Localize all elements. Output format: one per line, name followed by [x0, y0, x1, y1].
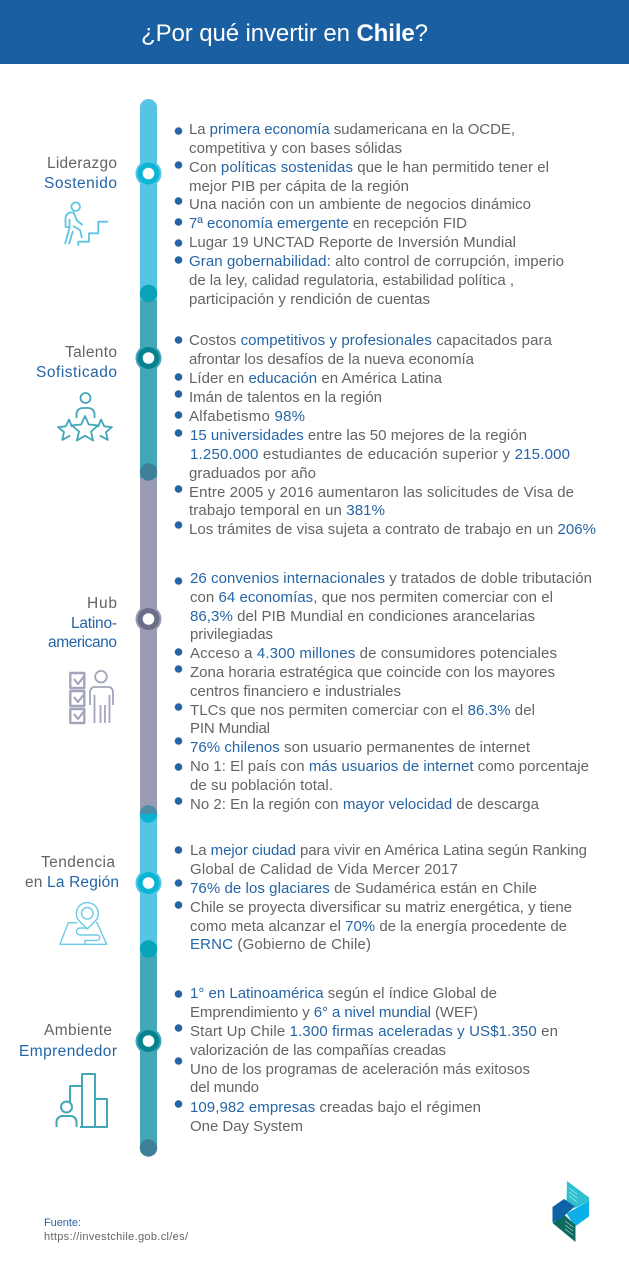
- source note: [44, 1217, 189, 1243]
- section: Ambiente Emprendedor: [19, 985, 558, 1135]
- bullet list: Ambiente: del mundo: [190, 1079, 259, 1096]
- bullet list: Liderazgo: Una nación con un ambiente de negocios dinámico: [189, 196, 531, 213]
- bullet list: Talento: Imán de talentos en la región: [189, 389, 382, 406]
- bullet list: Hub: Acceso a 4.300 millones de consumidores potenciales: [190, 645, 557, 662]
- bullet list: Hub: Zona horaria estratégica que coincide con los mayores: [190, 664, 555, 681]
- bullet list: Hub: No 1: El país con más usuarios de internet como porcentaje: [190, 758, 589, 775]
- heading: Liderazgo Sostenido: [44, 155, 117, 192]
- heading: Tendencia en La Región: [25, 854, 119, 891]
- heading: Talento Sofisticado: [36, 344, 117, 381]
- bullet list: Talento: graduados por año: [189, 465, 316, 482]
- heading: Hub Latino-americano: Latino-: [71, 615, 117, 632]
- timeline bar: [140, 99, 157, 1157]
- bullet list: Liderazgo: competitiva y con bases sólidas: [189, 140, 402, 157]
- bullet list: Hub: PIN Mundial: [190, 720, 270, 737]
- header band: [0, 0, 629, 64]
- bullet list: Tendencia: ERNC (Gobierno de Chile): [190, 936, 371, 953]
- bullet list: Liderazgo: Con políticas sostenidas que le han permitido tener el: [189, 159, 549, 176]
- section: Talento Sofisticado: [36, 332, 596, 538]
- bullet list: Tendencia: La mejor ciudad para vivir en América Latina según Ranking: [190, 842, 587, 859]
- heading: Talento Sofisticado: Talento: [65, 344, 117, 361]
- bullet list: Talento: Costos competitivos y profesionales capacitados para: [189, 332, 553, 349]
- bullet list: Hub: 86,3% del PIB Mundial en condiciones arancelarias: [190, 608, 535, 625]
- bullet list: Talento: trabajo temporal en un 381%: [189, 502, 385, 519]
- bullet list: Hub: de su población total.: [190, 777, 333, 794]
- bullet list: Talento: Líder en educación en América Latina: [189, 370, 443, 387]
- timeline node 5: [136, 1028, 162, 1054]
- icon: location pin on map: [60, 903, 107, 944]
- bullet list: Talento: Los trámites de visa sujeta a contrato de trabajo en un 206%: [189, 521, 596, 538]
- heading: Liderazgo Sostenido: Sostenido: [44, 175, 117, 192]
- section: Tendencia en La Región: [25, 842, 587, 953]
- bullet list: Hub: centros financiero e industriales: [190, 683, 401, 700]
- bullet list: Ambiente: Emprendimiento y 6° a nivel mundial (WEF): [190, 1004, 478, 1021]
- icon: person and bar chart: [56, 1074, 107, 1127]
- bullet list: Tendencia: como meta alcanzar el 70% de la energía procedente de: [190, 918, 567, 935]
- bullet list: Liderazgo: 7ª economía emergente en recepción FID: [189, 215, 467, 232]
- bullet list: Hub: [175, 570, 592, 813]
- icon: person with three stars: [58, 393, 112, 440]
- source note: https://investchile.gob.cl/es/: [44, 1231, 189, 1243]
- heading: Tendencia en La Región: Tendencia: [41, 854, 115, 871]
- bullet list: Liderazgo: [175, 121, 564, 308]
- bullet list: Tendencia: [175, 842, 587, 953]
- bullet list: Hub: 26 convenios internacionales y tratados de doble tributación: [190, 570, 592, 587]
- bullet list: Hub: 76% chilenos son usuario permanentes de internet: [190, 739, 531, 756]
- heading: Tendencia en La Región: en La Región: [25, 874, 119, 891]
- heading: Hub Latino-americano: americano: [48, 634, 117, 651]
- bullet list: Ambiente: valorización de las compañías creadas: [190, 1042, 446, 1059]
- bullet list: Tendencia: 76% de los glaciares de Sudamérica están en Chile: [190, 880, 537, 897]
- bullet list: Hub: TLCs que nos permiten comerciar con el 86.3% del: [190, 702, 535, 719]
- bullet list: Liderazgo: mejor PIB per cápita de la región: [189, 178, 409, 195]
- bullet list: Liderazgo: participación y rendición de cuentas: [189, 291, 430, 308]
- bullet list: Ambiente: [175, 985, 558, 1135]
- icon: checklist and person: [70, 671, 113, 723]
- bullet list: Ambiente: 1° en Latinoamérica según el índice Global de: [190, 985, 497, 1002]
- timeline node 2: [136, 345, 162, 371]
- section: Hub Latinoamericano: [48, 570, 592, 813]
- bullet list: Talento: Entre 2005 y 2016 aumentaron las solicitudes de Visa de: [189, 484, 574, 501]
- timeline node 3: [136, 606, 162, 632]
- bullet list: Ambiente: Uno de los programas de aceleración más exitosos: [190, 1061, 530, 1078]
- bullet list: Ambiente: Start Up Chile 1.300 firmas aceleradas y US$1.350 en: [190, 1023, 558, 1040]
- section: Liderazgo Sostenido: [44, 121, 564, 308]
- bullet list: Ambiente: One Day System: [190, 1118, 303, 1135]
- bullet list: Hub: con 64 economías, que nos permiten comerciar con el: [190, 589, 553, 606]
- bullet list: Talento: afrontar los desafíos de la nueva economía: [189, 351, 475, 368]
- logo: [552, 1181, 589, 1242]
- bullet list: Liderazgo: La primera economía sudamericana en la OCDE,: [189, 121, 515, 138]
- bullet list: Talento: Alfabetismo 98%: [189, 408, 305, 425]
- bullet list: Tendencia: Global de Calidad de Vida Mercer 2017: [190, 861, 458, 878]
- heading: Liderazgo Sostenido: Liderazgo: [47, 155, 117, 172]
- bullet list: Talento: 1.250.000 estudiantes de educación superior y 215.000: [190, 446, 570, 463]
- heading: Hub Latino-americano: [48, 595, 117, 651]
- bullet list: Ambiente: 109,982 empresas creadas bajo el régimen: [190, 1099, 481, 1116]
- heading: Hub Latino-americano: Hub: [87, 595, 117, 612]
- bullet list: Talento: [175, 332, 596, 538]
- heading: Ambiente Emprendedor: [19, 1022, 117, 1060]
- heading: Talento Sofisticado: Sofisticado: [36, 364, 117, 381]
- source note: Fuente:: [44, 1217, 81, 1229]
- bullet list: Hub: No 2: En la región con mayor velocidad de descarga: [190, 796, 540, 813]
- header band: ¿Por qué invertir en Chile?: [141, 20, 428, 47]
- bullet list: Liderazgo: Lugar 19 UNCTAD Reporte de Inversión Mundial: [189, 234, 516, 251]
- heading: Ambiente Emprendedor: Ambiente: [44, 1022, 112, 1039]
- bullet list: Liderazgo: Gran gobernabilidad: alto control de corrupción, imperio: [189, 253, 564, 270]
- bullet list: Liderazgo: de la ley, calidad regulatoria, estabilidad política ,: [189, 272, 514, 289]
- bullet list: Hub: privilegiadas: [190, 626, 273, 643]
- icon: person climbing stairs: [65, 202, 108, 246]
- bullet list: Talento: 15 universidades entre las 50 mejores de la región: [190, 427, 527, 444]
- bullet list: Tendencia: Chile se proyecta diversificar su matriz energética, y tiene: [190, 899, 572, 916]
- heading: Ambiente Emprendedor: Emprendedor: [19, 1043, 117, 1060]
- timeline node 1: [136, 160, 162, 186]
- timeline node 4: [136, 870, 162, 896]
